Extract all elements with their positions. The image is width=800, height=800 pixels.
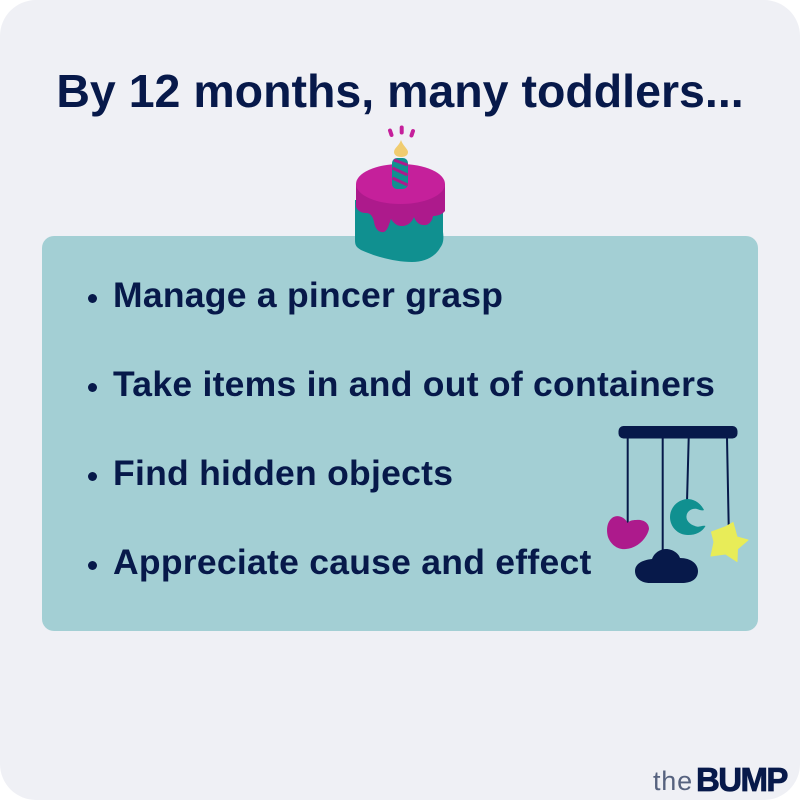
bullet list	[88, 275, 715, 582]
icon: birthday cake	[355, 128, 445, 262]
list item: cause and effect: Appreciate cause and effect	[113, 542, 592, 582]
cloud	[635, 549, 698, 583]
icon: baby mobile	[607, 426, 748, 583]
logo: the Bump	[653, 761, 788, 798]
logo: the Bump: BUMP	[696, 761, 787, 798]
list item: pincer grasp: Manage a pincer grasp	[113, 275, 503, 315]
star	[711, 522, 748, 562]
flame	[394, 140, 408, 157]
moon	[670, 499, 706, 535]
list item: hidden objects: Find hidden objects	[113, 453, 453, 493]
sparks	[390, 128, 413, 136]
title: By 12 months, many toddlers...	[56, 65, 744, 117]
panel: milestones	[42, 236, 758, 631]
list item: containers: Take items in and out of containers	[113, 364, 715, 404]
heart	[607, 516, 649, 549]
logo: the Bump: the	[653, 766, 693, 796]
candle	[392, 158, 408, 189]
